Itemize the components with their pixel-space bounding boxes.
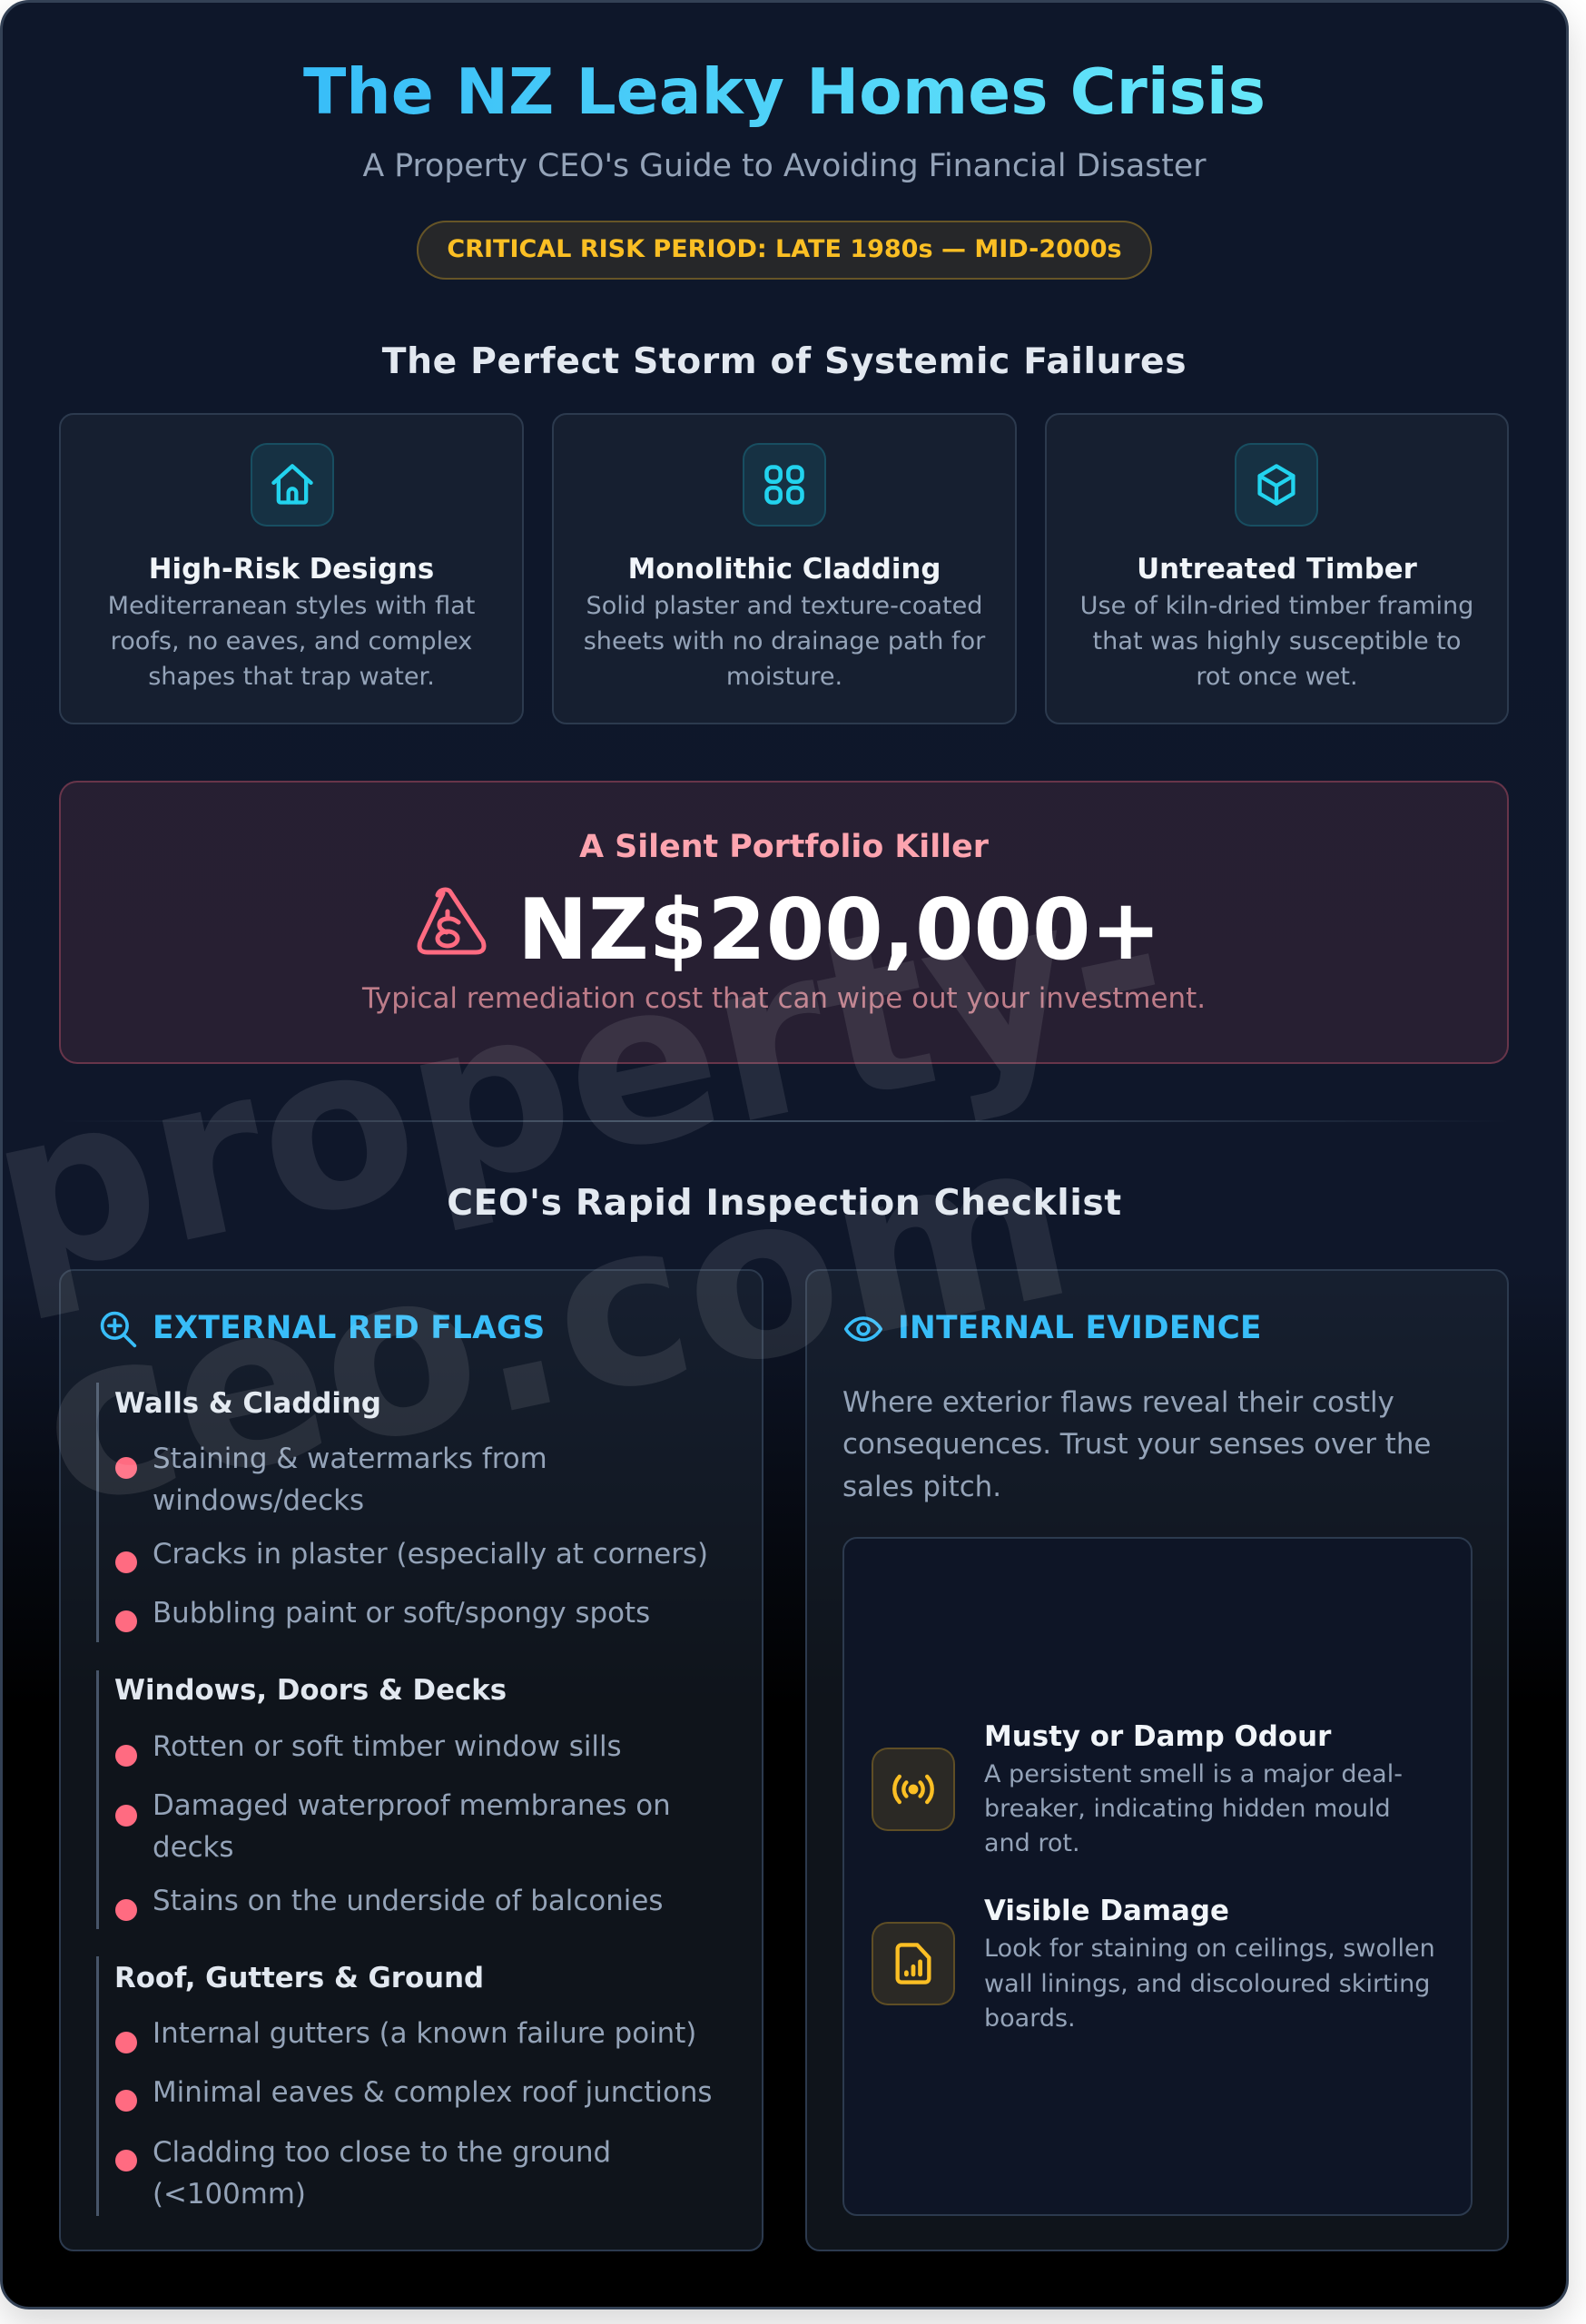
inner evidence box	[842, 1537, 1473, 2216]
icon: box	[1235, 443, 1318, 527]
checklist item: Bubbling paint or soft/spongy spots	[153, 1597, 650, 1630]
intro text: Where exterior flaws reveal their costly	[842, 1386, 1394, 1419]
checklist item: Damaged waterproof membranes on	[153, 1789, 671, 1822]
panel heading: INTERNAL EVIDENCE	[898, 1310, 1262, 1346]
checklist item: Cladding too close to the ground	[153, 2136, 611, 2169]
icon: signal	[872, 1748, 955, 1831]
risk period pill: CRITICAL RISK PERIOD: LATE 1980s — MID-2000s	[447, 235, 1122, 263]
card description: roofs, no eaves, and complex	[111, 627, 472, 655]
evidence description: boards.	[984, 2004, 1076, 2033]
card description: shapes that trap water.	[148, 663, 435, 691]
intro text	[842, 1386, 1431, 1503]
evidence description: wall linings, and discoloured skirting	[984, 1970, 1430, 1998]
panel: internal evidence	[805, 1269, 1509, 2251]
group: walls and cladding	[96, 1383, 708, 1642]
watermark: property-	[0, 828, 1188, 1329]
cost figure: NZ$200,000+	[517, 881, 1161, 979]
evidence: visible damage	[872, 1895, 1435, 2033]
checklist item: Stains on the underside of balconies	[153, 1885, 663, 1917]
panel: high-risk designs	[59, 413, 524, 724]
panel heading: EXTERNAL RED FLAGS	[153, 1310, 545, 1346]
checklist item: windows/decks	[153, 1484, 364, 1517]
card description: moisture.	[726, 663, 842, 691]
watermark: ceo.com	[19, 1088, 1090, 1558]
panel: monolithic cladding	[552, 413, 1017, 724]
card title: Untreated Timber	[1137, 553, 1417, 586]
heading: inspection checklist: CEO's Rapid Inspection Checklist	[447, 1183, 1122, 1224]
evidence description: A persistent smell is a major deal-	[984, 1760, 1403, 1788]
panel: external red flags	[59, 1269, 763, 2251]
icon: house	[251, 443, 334, 527]
evidence description: and rot.	[984, 1829, 1080, 1857]
card description: sheets with no drainage path for	[584, 627, 985, 655]
subtitle: A Property CEO's Guide to Avoiding Financial Disaster	[362, 148, 1206, 184]
evidence description: breaker, indicating hidden mould	[984, 1795, 1391, 1823]
checklist item	[115, 1443, 547, 1517]
title: The NZ Leaky Homes Crisis	[303, 56, 1266, 129]
card description: Solid plaster and texture-coated	[586, 592, 982, 620]
panel: cost alert	[59, 781, 1509, 1064]
group heading: Roof, Gutters & Ground	[114, 1962, 484, 1994]
group: roof gutters and ground	[96, 1956, 712, 2216]
checklist item: Cracks in plaster (especially at corners)	[153, 1538, 708, 1571]
intro text: sales pitch.	[842, 1471, 1001, 1503]
checklist item: decks	[153, 1831, 234, 1864]
evidence title: Musty or Damp Odour	[984, 1720, 1331, 1753]
checklist item: Minimal eaves & complex roof junctions	[153, 2076, 712, 2109]
evidence: musty odour	[872, 1720, 1403, 1857]
cost caption: Typical remediation cost that can wipe out your investment.	[362, 982, 1206, 1015]
checklist item: Staining & watermarks from	[153, 1443, 547, 1475]
checklist item: (<100mm)	[153, 2178, 306, 2211]
card description	[1080, 592, 1473, 691]
checklist item	[115, 1789, 671, 1864]
card description: Use of kiln-dried timber framing	[1080, 592, 1473, 620]
group: windows doors and decks	[96, 1670, 671, 1929]
icon: magnifier	[100, 1311, 136, 1347]
icon: grid	[743, 443, 826, 527]
icon: money warning	[418, 888, 487, 955]
group heading: Windows, Doors & Decks	[114, 1674, 507, 1707]
checklist item	[115, 2136, 611, 2211]
watermark	[0, 828, 1188, 1558]
intro text: consequences. Trust your senses over the	[842, 1428, 1431, 1461]
card title: High-Risk Designs	[149, 553, 434, 586]
card title: Monolithic Cladding	[628, 553, 941, 586]
icon: document chart	[872, 1922, 955, 2005]
card description: rot once wet.	[1196, 663, 1358, 691]
evidence description	[984, 1760, 1403, 1857]
heading: systemic failures: The Perfect Storm of Systemic Failures	[382, 341, 1187, 382]
panel: untreated timber	[1045, 413, 1509, 724]
card description	[584, 592, 986, 691]
group heading: Walls & Cladding	[114, 1387, 381, 1420]
checklist item: Internal gutters (a known failure point)	[153, 2017, 696, 2050]
alert heading: A Silent Portfolio Killer	[579, 829, 989, 865]
card description: Mediterranean styles with flat	[108, 592, 475, 620]
evidence title: Visible Damage	[984, 1895, 1229, 1927]
checklist item: Rotten or soft timber window sills	[153, 1730, 622, 1763]
evidence description: Look for staining on ceilings, swollen	[984, 1935, 1435, 1963]
card description: that was highly susceptible to	[1093, 627, 1461, 655]
risk period pill	[417, 221, 1152, 280]
card description	[108, 592, 475, 691]
icon: eye	[844, 1316, 882, 1342]
evidence description	[984, 1935, 1435, 2033]
